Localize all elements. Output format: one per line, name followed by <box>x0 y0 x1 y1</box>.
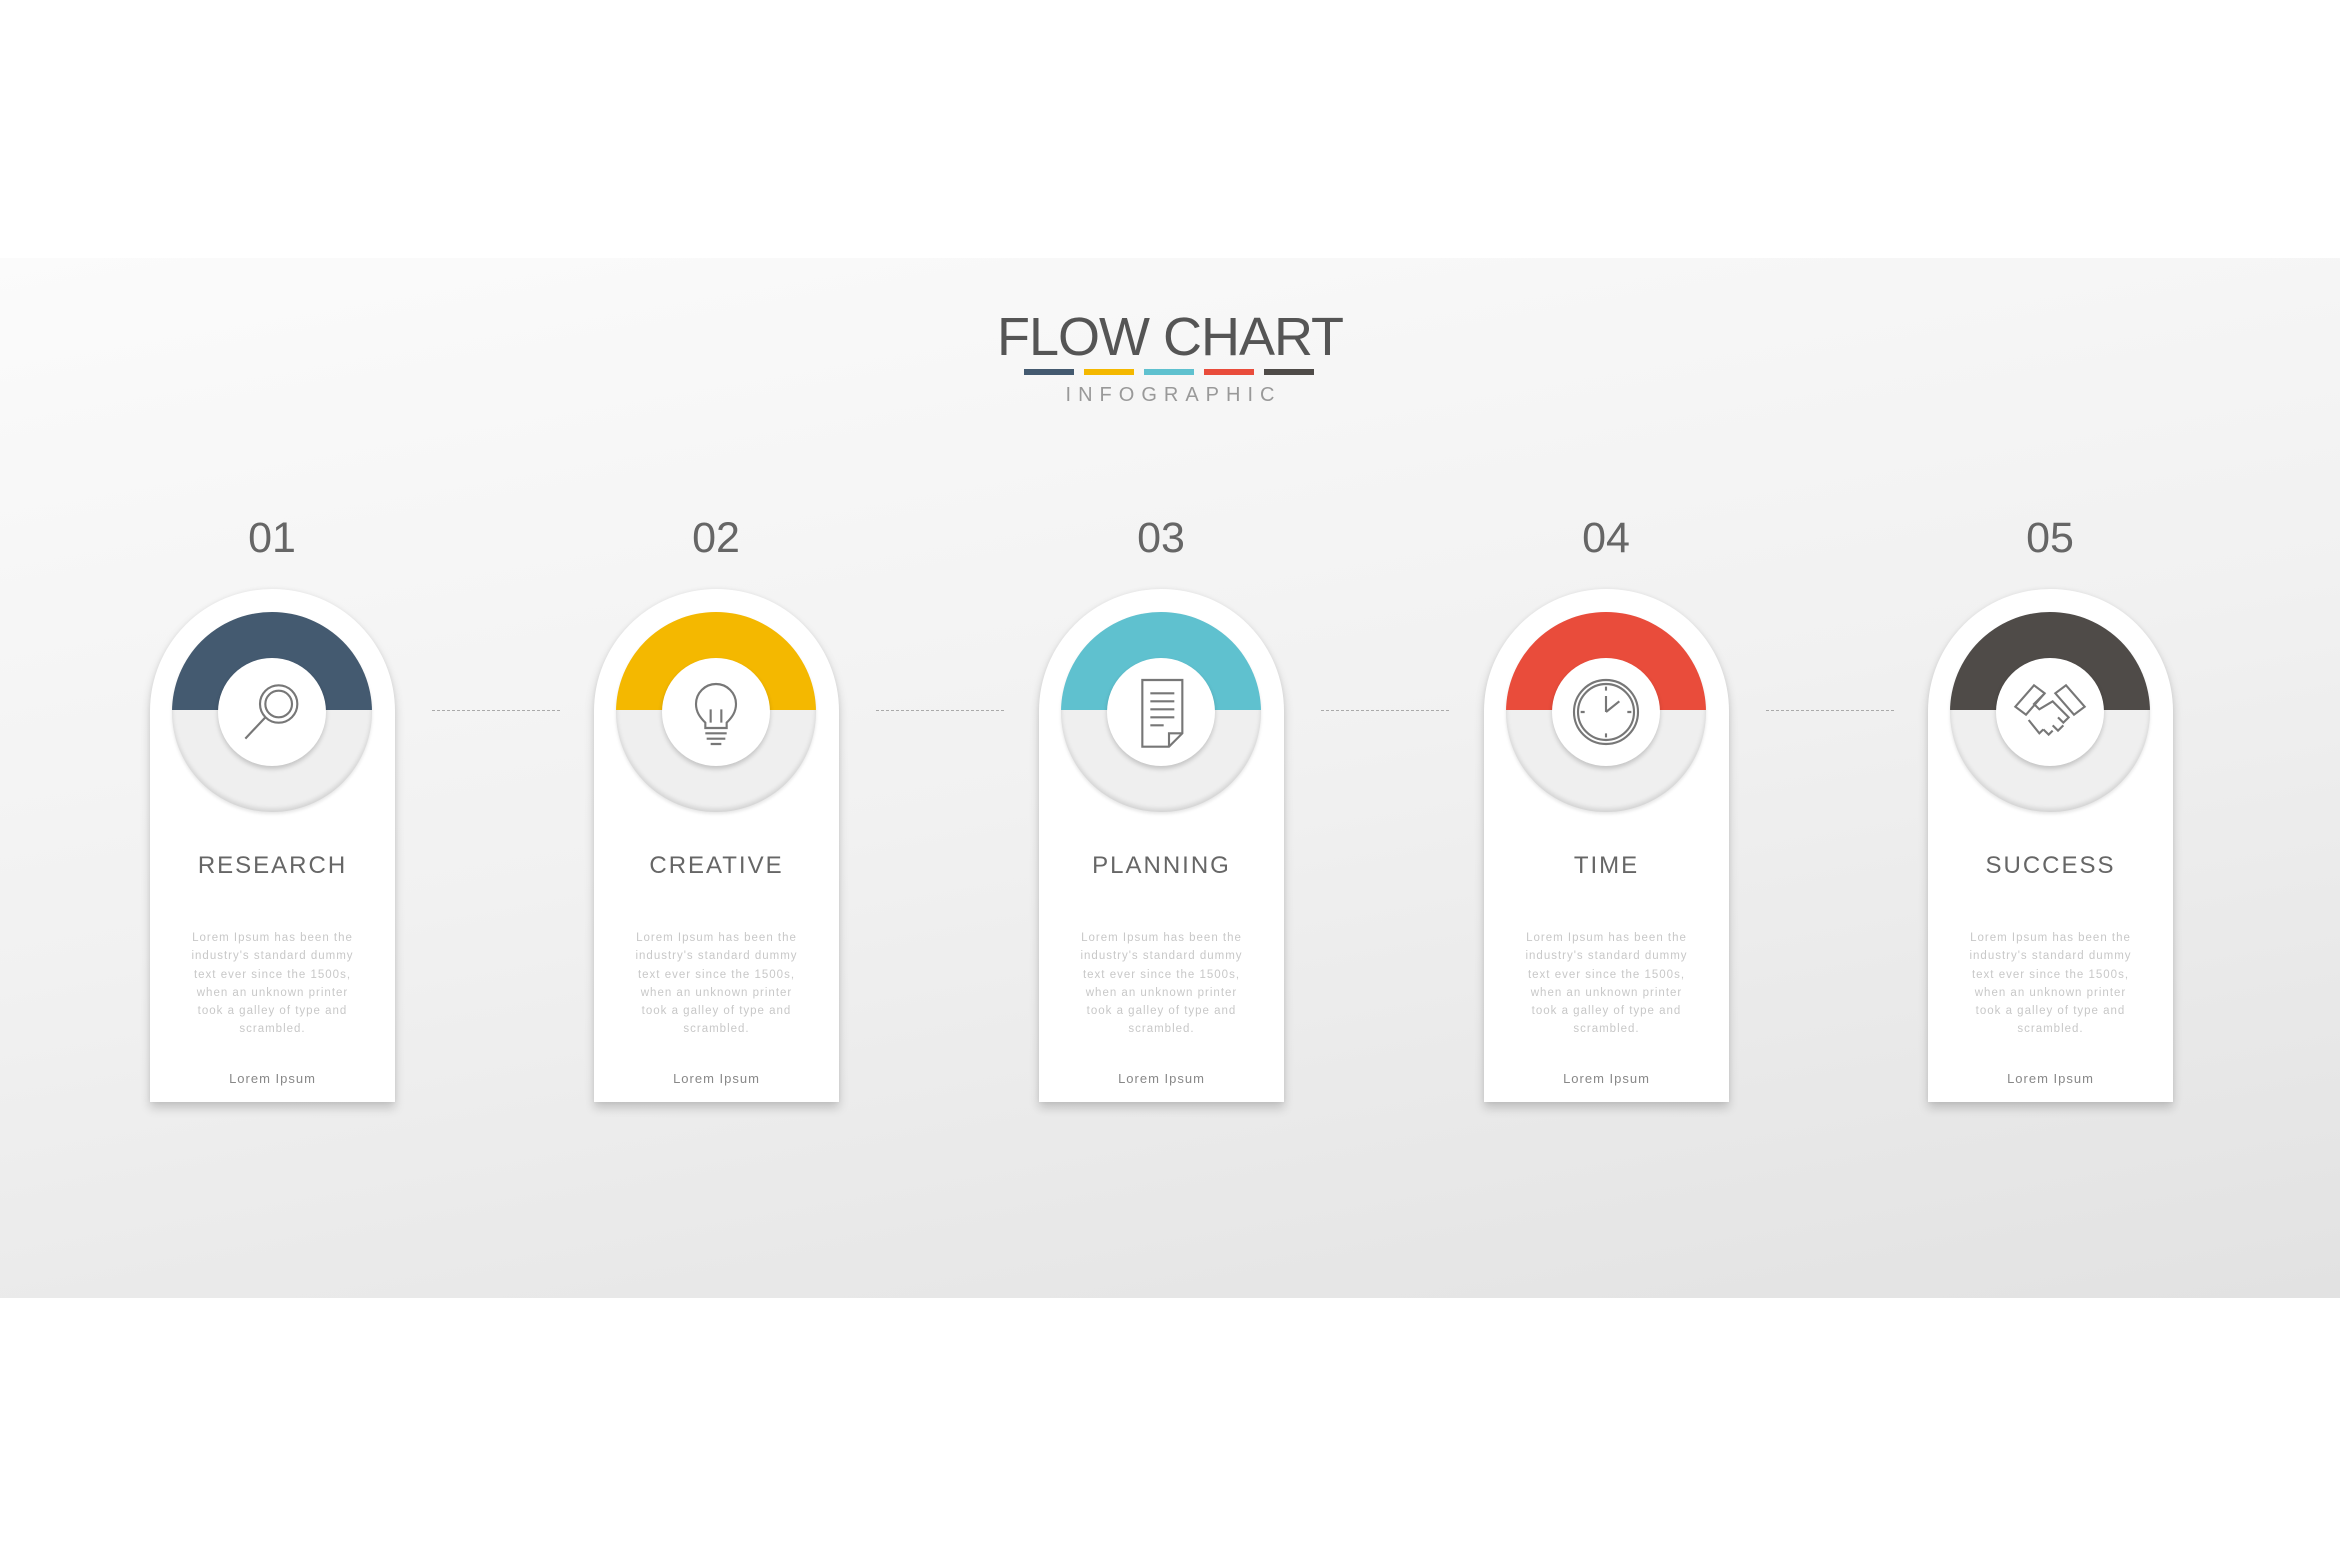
text block: Lorem Ipsum has been the industry's standard dummy text ever since the 1500s, when an unknown printer took a galley of type and scrambled. <box>191 932 354 1035</box>
number 04: 04 <box>1582 514 1630 562</box>
panel: planning <box>1039 589 1284 1102</box>
heading: TIME <box>1574 852 1639 879</box>
heading: SUCCESS <box>1985 852 2116 879</box>
icon: magnifier <box>218 658 326 766</box>
panel: time <box>1484 589 1729 1102</box>
footer: Lorem Ipsum <box>1118 1071 1205 1086</box>
text block: Lorem Ipsum has been the industry's standard dummy text ever since the 1500s, when an unknown printer took a galley of type and scrambled. <box>635 932 798 1035</box>
connector arrow 4 <box>1766 710 1894 711</box>
text block: Lorem Ipsum has been the industry's standard dummy text ever since the 1500s, when an unknown printer took a galley of type and scrambled. <box>1080 932 1243 1035</box>
panel: creative <box>594 589 839 1102</box>
icon: bulb <box>662 658 770 766</box>
icon: document <box>1107 658 1215 766</box>
panel: research <box>150 589 395 1102</box>
title color bars <box>1024 369 1314 375</box>
heading: CREATIVE <box>649 852 784 879</box>
subtitle: INFOGRAPHIC <box>1066 384 1281 406</box>
number 03: 03 <box>1137 514 1185 562</box>
number 01: 01 <box>248 514 296 562</box>
heading: PLANNING <box>1092 852 1231 879</box>
connector arrow 1 <box>432 710 560 711</box>
number 02: 02 <box>692 514 740 562</box>
text block: Lorem Ipsum has been the industry's standard dummy text ever since the 1500s, when an unknown printer took a galley of type and scrambled. <box>1969 932 2132 1035</box>
title: FLOW CHART <box>997 307 1343 367</box>
connector arrow 3 <box>1321 710 1449 711</box>
connector arrow 2 <box>876 710 1004 711</box>
panel: success <box>1928 589 2173 1102</box>
footer: Lorem Ipsum <box>229 1071 316 1086</box>
footer: Lorem Ipsum <box>2007 1071 2094 1086</box>
heading: RESEARCH <box>198 852 347 879</box>
footer: Lorem Ipsum <box>1563 1071 1650 1086</box>
footer: Lorem Ipsum <box>673 1071 760 1086</box>
text block: Lorem Ipsum has been the industry's standard dummy text ever since the 1500s, when an unknown printer took a galley of type and scrambled. <box>1525 932 1688 1035</box>
number 05: 05 <box>2026 514 2074 562</box>
icon: handshake <box>1996 658 2104 766</box>
icon: clock <box>1552 658 1660 766</box>
